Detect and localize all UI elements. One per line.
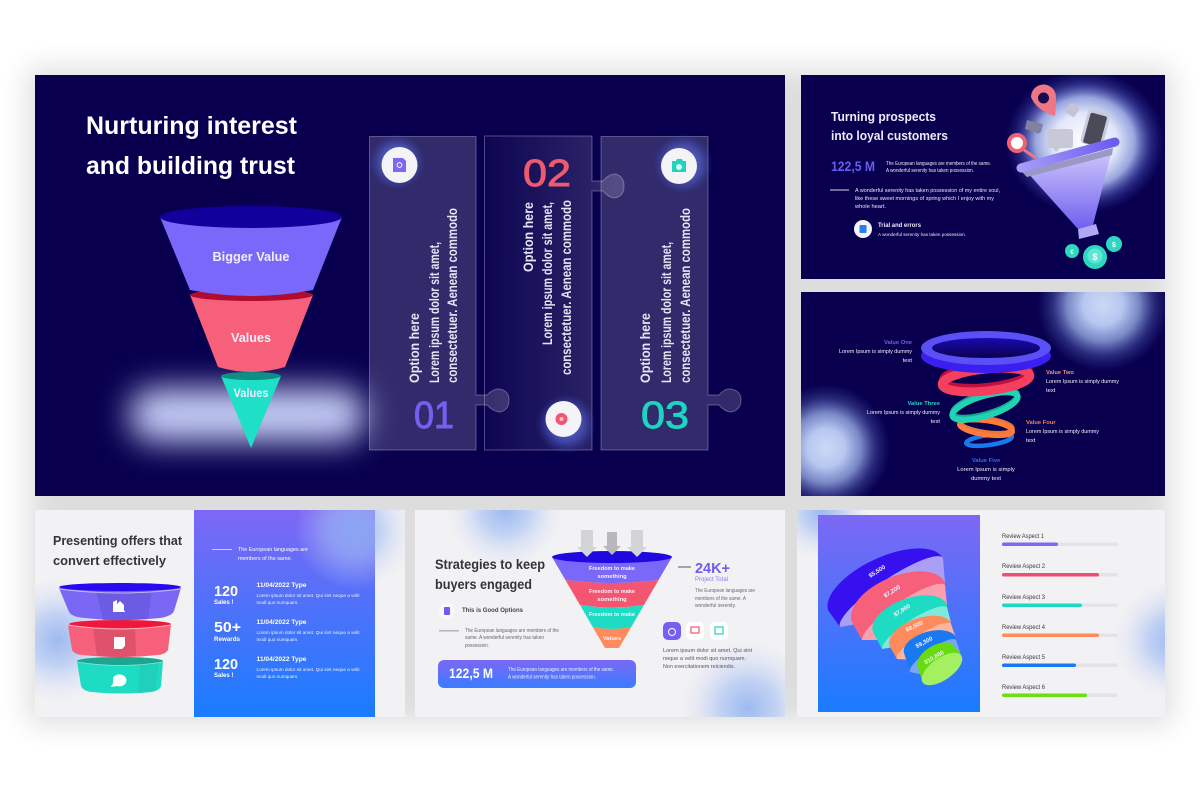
funnel labels xyxy=(589,566,636,642)
card 01: Option here xyxy=(407,313,422,383)
card 02: consectetuer. Aenean commodo xyxy=(559,200,574,375)
funnel glow xyxy=(130,388,365,442)
review aspect 2 xyxy=(1002,564,1118,576)
funnel labels: Freedom to make xyxy=(589,566,636,572)
funnel labels: Values xyxy=(231,331,271,345)
funnel value labels xyxy=(868,564,946,666)
slide title: Turning prospects xyxy=(831,109,936,124)
review aspect 6: Review Aspect 6 xyxy=(1002,685,1046,691)
layered funnel xyxy=(552,530,672,648)
three-level funnel xyxy=(160,206,342,448)
stat rows: 11/04/2022 Type xyxy=(256,582,307,589)
ring labels: Value Four xyxy=(1026,420,1056,426)
icon: coins: € xyxy=(1070,250,1074,256)
good options item: possession. xyxy=(465,643,489,649)
ring labels: Lorem Ipsum is simply dummy xyxy=(1026,429,1099,435)
ring labels: Value Three xyxy=(907,401,941,407)
stat: 24K+: Project Total xyxy=(695,577,728,583)
ring labels: Lorem Ipsum is simply dummy xyxy=(1046,379,1119,385)
icon: coins: $ xyxy=(1092,252,1098,262)
funnel labels: Values xyxy=(603,636,621,642)
stat rows: 50+ xyxy=(214,619,241,636)
stat: 122,5 M: The European languages are members of the same. xyxy=(886,161,991,167)
panel: nurturing interest slide xyxy=(35,75,785,496)
slide title xyxy=(435,556,545,592)
cup: red xyxy=(68,620,171,657)
ring labels xyxy=(839,340,1119,482)
icon: location pin xyxy=(1031,84,1056,116)
stat rows: modi quo numquam. xyxy=(256,674,298,679)
ring labels: text xyxy=(1026,438,1036,444)
slide title: Presenting offers that xyxy=(53,533,183,548)
review aspect 3: Review Aspect 3 xyxy=(1002,595,1046,601)
card 01 xyxy=(369,134,509,450)
slide title: into loyal customers xyxy=(831,128,948,143)
card 01: Lorem ipsum dolor sit amet, xyxy=(427,242,442,383)
trial and errors item xyxy=(854,220,966,238)
review bars xyxy=(1002,534,1118,697)
icon text xyxy=(663,648,752,670)
intro text: members of the same. xyxy=(238,556,292,562)
funnel labels: something xyxy=(597,597,627,603)
review aspect 1: Review Aspect 1 xyxy=(1002,534,1045,540)
panel: review aspects slide xyxy=(797,510,1165,717)
paragraph with rule xyxy=(830,188,1000,210)
stat: 24K+ xyxy=(678,560,755,609)
corner glows xyxy=(457,510,785,717)
corner glow xyxy=(300,510,404,584)
stat rows: Rewards xyxy=(214,637,241,643)
stat bar: 122,5 M: A wonderful serenity has taken possession. xyxy=(508,674,596,680)
title: and building trust xyxy=(86,152,296,180)
funnel value labels: $10,000 xyxy=(924,650,946,666)
cup: teal xyxy=(77,657,163,694)
stat rows: Lorem ipsum dolor sit amet. Qui sint neque a velit xyxy=(256,593,360,598)
review aspect 2: Review Aspect 2 xyxy=(1002,564,1046,570)
funnel halo xyxy=(1005,70,1165,214)
icon: phone xyxy=(1080,108,1111,148)
stat rows: 120 xyxy=(214,656,238,673)
ring labels: Value Five xyxy=(972,458,1001,464)
corner glows xyxy=(797,510,1165,687)
card 02: Option here xyxy=(521,202,536,272)
funnel value labels: $9,300 xyxy=(915,636,935,650)
ring labels: Value Two xyxy=(1046,370,1074,376)
good options item xyxy=(439,603,559,649)
icon text: Lorem ipsum dolor sit amet. Qui sint xyxy=(663,648,752,654)
slide title: Strategies to keep xyxy=(435,556,545,572)
good options item: This is Good Options xyxy=(462,608,524,614)
panel: value rings slide xyxy=(801,292,1165,496)
funnel labels: Bigger Value xyxy=(212,250,290,264)
funnel labels xyxy=(212,250,290,400)
stat bar: 122,5 M: 122,5 M xyxy=(449,665,493,681)
review aspect 5: Review Aspect 5 xyxy=(1002,655,1046,661)
stat: 122,5 M: 122,5 M xyxy=(831,158,875,174)
card 03: 03 xyxy=(641,395,689,437)
ring labels: Lorem Ipsum is simply xyxy=(957,467,1015,473)
stat rows: 11/04/2022 Type xyxy=(256,656,307,663)
stat rows xyxy=(214,582,360,679)
intro text xyxy=(212,547,308,562)
funnel labels: Values xyxy=(234,388,268,400)
trial and errors item: A wonderful serenity has taken possession. xyxy=(878,232,966,238)
panel: strategies slide xyxy=(415,510,785,717)
card 03 xyxy=(601,134,741,450)
review aspect 5 xyxy=(1002,655,1118,667)
ring labels: text xyxy=(1046,388,1056,394)
stacked rings xyxy=(921,331,1051,448)
stat rows: 11/04/2022 Type xyxy=(256,619,307,626)
paragraph with rule: whole heart. xyxy=(854,204,886,210)
slide title xyxy=(831,109,948,143)
gradient funnel card xyxy=(818,515,980,712)
card 03: consectetuer. Aenean commodo xyxy=(678,208,693,383)
stat: 24K+: 24K+ xyxy=(695,560,730,577)
stat: 24K+: The European languages are xyxy=(695,588,755,594)
review aspect 1 xyxy=(1002,534,1118,546)
review aspect 3 xyxy=(1002,595,1118,607)
stat rows: Lorem ipsum dolor sit amet. Qui sint neque a velit xyxy=(256,630,360,635)
ring labels: Lorem Ipsum is simply dummy xyxy=(867,410,940,416)
ring labels: dummy text xyxy=(971,476,1001,482)
ring labels: Lorem Ipsum is simply dummy xyxy=(839,349,912,355)
ring labels: text xyxy=(903,358,912,364)
stat rows: Lorem ipsum dolor sit amet. Qui sint neque a velit xyxy=(256,667,360,672)
stat: 122,5 M: A wonderful serenity has taken possession. xyxy=(886,168,974,174)
stat bar: 122,5 M xyxy=(438,660,636,688)
intro text: The European languages are xyxy=(238,547,308,553)
input arrows xyxy=(577,530,647,557)
icon text: Non exercitationem reiciendis. xyxy=(663,664,735,670)
icon text: neque a velit modi quo numquam. xyxy=(663,656,746,662)
stat rows: Sales ! xyxy=(214,673,233,679)
funnel labels: Freedom to make xyxy=(589,612,636,618)
title xyxy=(86,112,298,180)
stat rows: Sales ! xyxy=(214,600,233,606)
paragraph with rule: A wonderful serenity has taken possession of my entire soul, xyxy=(855,188,1000,194)
stat rows: modi quo numquam. xyxy=(256,637,298,642)
good options item: same. A wonderful serenity has taken xyxy=(465,635,544,641)
gradient stats panel xyxy=(194,510,404,717)
slide title xyxy=(53,533,183,568)
funnel value labels: $7,900 xyxy=(893,603,912,619)
tilted funnel xyxy=(827,548,968,691)
icon: magnifier xyxy=(1009,135,1036,158)
review aspect 4 xyxy=(1002,625,1118,637)
card 02 xyxy=(484,136,624,454)
card 02: 02 xyxy=(523,153,571,195)
stat rows: modi quo numquam. xyxy=(256,600,298,605)
paragraph with rule: like these sweet mornings of spring which I enjoy with my xyxy=(855,196,994,202)
funnel illustration xyxy=(1009,84,1122,269)
stat: 24K+: wonderful serenity. xyxy=(695,603,736,609)
ring labels: Value One xyxy=(884,340,913,346)
panel: turning prospects slide xyxy=(801,70,1165,279)
ring labels: text xyxy=(931,419,940,425)
card 01: consectetuer. Aenean commodo xyxy=(445,208,460,383)
card 03: Option here xyxy=(638,313,653,383)
trial and errors item: Trial and errors xyxy=(878,223,922,229)
soft glow xyxy=(35,589,104,692)
funnel labels: something xyxy=(597,574,627,580)
corner glows xyxy=(801,292,1165,496)
funnel value labels: $7,200 xyxy=(883,584,902,600)
stacked cup funnel xyxy=(59,583,181,694)
stat: 122,5 M xyxy=(831,158,991,174)
slide title: buyers engaged xyxy=(435,576,532,592)
stat rows: 120 xyxy=(214,583,238,600)
funnel labels: Freedom to make xyxy=(589,589,636,595)
title: Nurturing interest xyxy=(86,112,298,140)
icon: coins xyxy=(1065,236,1122,269)
card 02: Lorem ipsum dolor sit amet, xyxy=(540,202,555,345)
icon: coins: $ xyxy=(1112,242,1116,249)
card 03: Lorem ipsum dolor sit amet, xyxy=(659,242,674,383)
funnel value labels: $5,500 xyxy=(868,564,887,580)
card 01: 01 xyxy=(414,395,454,437)
good options item: The European languages are members of the xyxy=(465,628,559,634)
funnel value labels: $8,500 xyxy=(905,620,925,634)
panel: presenting offers slide xyxy=(35,510,405,717)
cup: purple xyxy=(59,583,181,620)
review aspect 6 xyxy=(1002,685,1118,697)
icon row xyxy=(663,622,728,640)
stat: 24K+: members of the same. A xyxy=(695,596,747,602)
icon: chat bubbles xyxy=(1025,102,1080,152)
slide title: convert effectively xyxy=(53,553,167,568)
review aspect 4: Review Aspect 4 xyxy=(1002,625,1046,631)
stat bar: 122,5 M: The European languages are members of the same. xyxy=(508,667,614,673)
